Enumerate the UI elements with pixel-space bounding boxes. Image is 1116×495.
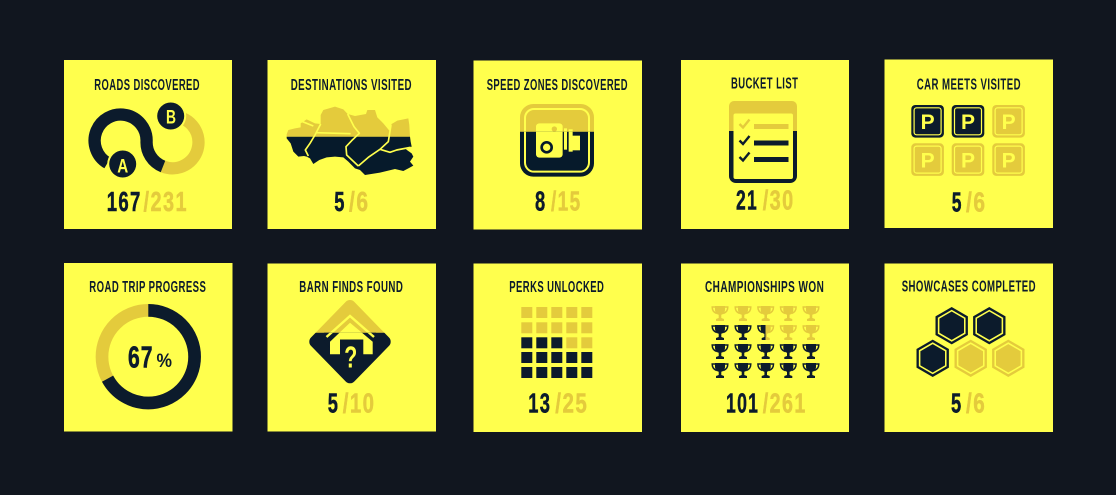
panel: barn finds found — [268, 264, 436, 432]
panel: bucket list — [681, 60, 849, 229]
count: 8 of 15 — [535, 186, 582, 217]
count: 5 of 6: /6 — [966, 387, 986, 418]
count: 167 of 231: 167 — [107, 186, 142, 217]
count: 5 of 6 — [334, 186, 370, 217]
icon: speed camera — [520, 104, 594, 177]
icon: hexagons — [916, 307, 1024, 377]
panel: championships won — [681, 264, 849, 432]
panel: road trip progress — [64, 263, 232, 432]
count: 5 of 6: 5 — [952, 187, 963, 218]
panel: speed zones discovered — [474, 60, 642, 230]
count: 5 of 6: 5 — [951, 387, 962, 418]
panel: perks unlocked — [474, 264, 642, 432]
count: 8 of 15: 8 — [535, 186, 546, 217]
heading: showcases completed: SHOWCASES COMPLETED — [902, 278, 1036, 295]
panel: car meets visited — [884, 60, 1053, 228]
heading: championships won: CHAMPIONSHIPS WON — [705, 279, 824, 296]
count: 13 of 25: 13 — [528, 388, 551, 419]
heading: roads discovered: ROADS DISCOVERED — [94, 77, 200, 94]
panel: destinations visited — [268, 60, 436, 229]
heading: road trip progress: ROAD TRIP PROGRESS — [89, 279, 206, 296]
icon: parking tiles: P — [921, 149, 935, 172]
icon: parking tiles: P — [1002, 149, 1016, 172]
heading: destinations visited: DESTINATIONS VISITED — [291, 77, 412, 94]
count: 167 of 231 — [107, 186, 188, 217]
count: 5 of 10: 5 — [328, 388, 339, 419]
icon: road from A to B — [95, 100, 198, 180]
count: 8 of 15: /15 — [551, 186, 582, 217]
heading: speed zones discovered: SPEED ZONES DISCOVERED — [487, 77, 628, 94]
count: 101 of 261: /261 — [763, 388, 807, 419]
heading: bucket list: BUCKET LIST — [731, 75, 798, 92]
count: 13 of 25 — [528, 388, 588, 419]
icon: road from A to B: A — [117, 156, 128, 177]
panel: roads discovered — [64, 60, 232, 229]
heading: perks unlocked: PERKS UNLOCKED — [509, 279, 604, 296]
count: 21 of 30: /30 — [763, 184, 795, 215]
donut chart: 67 percent — [102, 310, 195, 403]
chart: trophies — [712, 306, 819, 378]
icon: parking tiles: P — [961, 149, 975, 172]
count: 167 of 231: /231 — [144, 186, 188, 217]
count: 5 of 6 — [951, 387, 986, 418]
count: 13 of 25: /25 — [555, 388, 588, 419]
panel: showcases completed — [884, 264, 1053, 432]
icon: barn diamond sign: ? — [344, 340, 357, 375]
icon: road from A to B: B — [166, 108, 176, 128]
icon: region map — [287, 107, 413, 175]
donut chart: 67 percent: 67 — [128, 339, 154, 374]
count: 5 of 10 — [328, 388, 376, 419]
count: 5 of 6: /6 — [966, 187, 986, 218]
count: 21 of 30 — [736, 184, 795, 215]
count: 5 of 6 — [952, 187, 986, 218]
icon: parking tiles: P — [921, 111, 935, 134]
donut chart: 67 percent: % — [156, 351, 172, 372]
count: 5 of 6: /6 — [349, 186, 370, 217]
count: 5 of 10: /10 — [343, 388, 376, 419]
icon: parking tiles: P — [1002, 111, 1016, 134]
count: 101 of 261 — [726, 388, 807, 419]
heading: car meets visited: CAR MEETS VISITED — [917, 76, 1021, 93]
icon: checklist — [729, 101, 797, 183]
heading: barn finds found: BARN FINDS FOUND — [299, 279, 403, 296]
icon: parking tiles: P — [961, 111, 975, 134]
icon: parking tiles — [911, 105, 1025, 176]
count: 101 of 261: 101 — [726, 388, 759, 419]
chart: perk squares — [521, 307, 592, 378]
count: 5 of 6: 5 — [334, 186, 346, 217]
icon: barn diamond sign — [315, 306, 385, 377]
count: 21 of 30: 21 — [736, 184, 758, 215]
